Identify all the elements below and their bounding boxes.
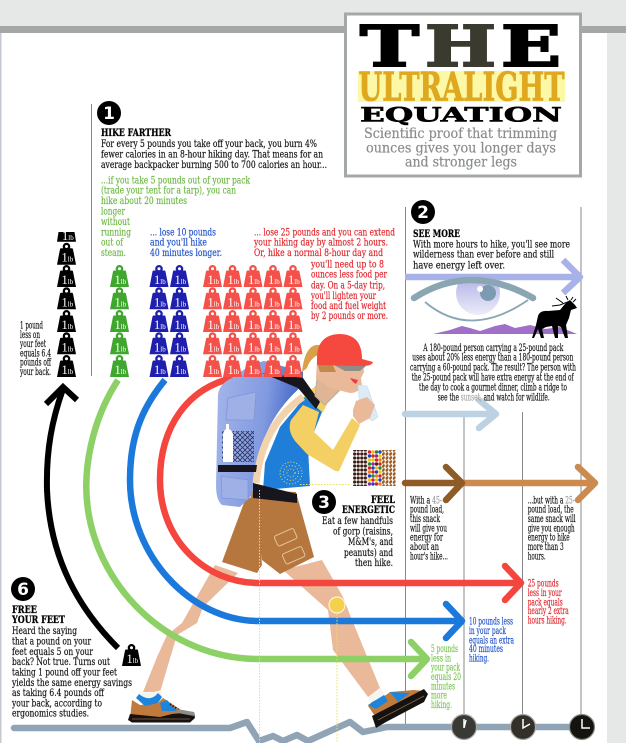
text: 5 pounds less: minutes [431,681,455,692]
frame sheath [256,397,303,483]
vest spiral [280,462,302,484]
weight: near foot [122,644,141,666]
blue text: 40 minutes longer. [150,248,222,259]
text: 25-pound load: same snack will [528,514,576,525]
text: 25-pound load: more than 3 [528,542,564,553]
heading: SEE MORE [413,229,460,240]
text: 5 pounds less: more [431,691,447,702]
intro text: With more hours to hike, you'll see more [413,239,570,250]
arm sleeve [290,405,360,471]
weights: red stack: 1lb [268,318,280,332]
subtitle [364,126,557,170]
badge 3: 3 [318,493,330,513]
weights: black stack: 1lb [62,340,74,354]
arrow: black arc up to weight stack [46,387,118,648]
text: 10 pounds less: hiking. [469,654,489,665]
caption: 1 pound less: less on [20,330,40,341]
shorts [222,490,314,574]
badge 6: 6 [17,580,29,600]
text: 5 pounds less: hiking. [431,700,452,711]
backpack [216,361,303,507]
body text: Eat a few handfuls [322,516,393,527]
weights: red stack: 1lb [208,363,220,377]
red text: by 2 pounds or more. [311,311,388,322]
text: 10 pounds less: 10 pounds less [469,616,513,627]
icon: purple mountains [433,324,577,334]
pack pockets [221,392,256,500]
weights: red stack: 1lb [248,363,260,377]
cap [317,334,373,366]
clock 2 [510,714,536,740]
red text: you'll need up to 8 [310,260,384,271]
green text: running [101,228,131,238]
weights: red stack: 1lb [208,295,220,309]
badge 1: 1 [103,104,115,124]
text: 45-pound load: this snack [410,514,441,525]
weights: blue stack: 1lb [154,318,166,332]
clock 3 [570,714,594,740]
text: 5 pounds less: less in [431,653,451,664]
weights: red stack: 1lb [248,295,260,309]
caption: 1 pound less: your back. [19,367,51,378]
green text: steam. [101,248,126,259]
text: 25-pound load: ...but with a 25- [528,495,575,506]
green text [101,176,251,259]
weights: green stack: 1lb [114,295,127,309]
weights: black stack: 1lb [62,251,74,265]
caption: 1 pound less: equals 6.4 [20,349,51,360]
text: 10 pounds less [469,616,514,665]
arrow: green arc [86,380,427,659]
text: 45-pound load [410,495,448,562]
red text: ... lose 25 pounds and you can extend [254,228,395,238]
title: THE: H [425,14,496,80]
panel: 3 feel energetic [312,490,395,569]
mesh pocket [222,431,254,462]
weights: black stack: 1lb [62,295,74,309]
weights: blue stack [150,265,189,377]
text: 45-pound load: hour's hike... [410,551,448,562]
arrow: brown short [405,467,462,500]
weights: blue stack: 1lb [154,273,166,287]
caption: 1 pound less: 1 pound [20,321,43,332]
title: THE: E [501,14,561,80]
arrow: light blue [405,400,496,428]
body text: peanuts) and [344,548,393,559]
caption: 1 pound less [19,321,52,378]
dotted guide lines [260,484,351,743]
body text: taking 1 pound off your feet [12,668,117,679]
weights: red stack: 1lb [268,295,280,309]
panel: 1 hike farther [97,101,395,322]
ground line [14,722,575,741]
text: 25-pound load: hours. [528,551,546,562]
weights: red stack: 1lb [288,340,300,354]
weights: green stack [110,265,129,377]
weights: black stack: 1lb [62,363,74,377]
red text: your hiking day by almost 2 hours. [253,238,388,249]
body text: then hike. [355,558,393,569]
body text: ergonomics studies. [12,709,89,720]
intro text: average backpacker burning 500 to 700 calories an hour... [101,160,327,171]
text: 25-pound load [528,495,576,562]
text: 45-pound load: will give you [410,523,447,534]
vest [263,397,322,490]
weights: black stack: 1lb [62,273,74,287]
weights: blue stack: 1lb [174,273,187,287]
weights: blue stack: 1lb [154,340,166,354]
red text: ounces less food per [311,270,387,281]
green text: ...if you take 5 pounds out of your pack [101,176,251,186]
weights: green stack: 1lb [114,340,127,354]
M&M's [368,450,382,486]
weights: red stack: 1lb [248,318,260,332]
water bottle [223,424,233,462]
panel: 6 free your feet [11,577,132,720]
text: 25-pound load: energy to hike [528,533,570,544]
text: 5 pounds less: your pack [430,663,461,674]
text: 25 pounds less [528,579,569,626]
red text [253,228,395,322]
weights: red stack: 1lb [228,273,240,287]
subtitle: ounces gives you longer days [366,140,556,156]
body text [410,343,576,404]
text: 25-pound load: pound load, the [528,505,574,516]
weights: blue stack: 1lb [174,295,187,309]
badge 2: 2 [417,203,429,223]
heading: FEEL [371,495,395,506]
text: 25-pound load: give you enough [528,523,575,534]
weights: red stack: 1lb [268,363,280,377]
intro text: fewer calories in an 8-hour hiking day. That means for an [101,150,323,160]
icon: eye [414,271,533,321]
clock 1 [452,714,476,740]
caption: 1 pound less: pounds off [20,357,52,368]
green text: hike about 20 minutes [101,196,187,207]
weights: red stack [203,265,302,377]
body text: your back, according to [11,699,102,710]
divider rules [92,104,581,727]
weights: red stack: 1lb [208,318,220,332]
red text: day. On a 5-day trip, [311,280,385,291]
icon: back boot [128,690,195,722]
weights: red stack: 1lb [268,273,280,287]
weights: black stack [57,229,76,377]
body text: that a pound on your [12,636,91,647]
straps [218,373,320,503]
icon: knee joint [329,597,345,613]
text: 10 pounds less: 40 minutes [469,644,503,655]
weights: green stack: 1lb [114,273,127,287]
icon: front boot [368,688,428,728]
red text: you'll lighten your [310,291,376,302]
body text: Heard the saying [12,626,77,637]
body text: see the sunset, and watch for wildlife. [438,393,550,404]
weights: red stack: 1lb [228,340,240,354]
green text: longer [101,207,125,218]
body text: yields the same energy savings [11,678,132,689]
yellow shirt body [302,380,333,420]
weights: red stack: 1lb [208,273,220,287]
weights: red stack: 1lb [288,295,300,309]
intro text [101,139,327,171]
subtitle: and stronger legs [405,154,517,170]
title: EQUATION: EQUATION [360,102,562,126]
glasses [332,364,366,371]
text: 10 pounds less: equals an extra [469,635,514,646]
arrow: blue head [446,604,462,638]
badge 2 [411,200,435,224]
intro text: For every 5 pounds you take off your back, you burn 4% [101,139,317,150]
arrow: red head [505,566,521,600]
heading: YOUR FEET [11,615,65,626]
weights: red stack: 1lb [288,318,300,332]
subtitle: Scientific proof that trimming [364,126,557,142]
icon: gorp [353,450,396,486]
caption: 1 pound less: your feet [19,339,46,350]
green text: out of [101,238,124,249]
weights: blue stack: 1lb [174,363,187,377]
green text: without [101,217,130,228]
weights: red stack: 1lb [248,340,260,354]
body text [11,626,132,720]
weights: blue stack: 1lb [174,340,187,354]
blue text: ... lose 10 pounds [150,228,216,238]
heading: HIKE FARTHER [101,128,172,139]
body text [322,516,393,569]
panel: clocks [452,714,594,740]
body text: M&M's, and [348,537,393,548]
hand [353,397,375,424]
arrow: red arc [160,376,520,583]
weights: red stack: 1lb [208,340,220,354]
text: 25 pounds less: 25 pounds [528,579,559,590]
lips [350,378,358,384]
weights: red stack: 1lb [228,363,240,377]
text: 45-pound load: energy for [410,533,443,544]
heading [11,605,65,626]
heading: ENERGETIC [342,505,395,516]
text: 45-pound load: about an [410,542,439,553]
icon: elk [532,296,577,338]
text: 25 pounds less: less in your [528,588,562,599]
weights: red stack: 1lb [228,295,240,309]
title: THE: T [360,14,419,80]
blue text: and you'll hike [150,238,207,249]
red text: food and fuel weight [311,301,386,312]
body text: back? Not true. Turns out [12,657,110,668]
weight: near foot: 1lb [126,652,139,666]
weights: red stack: 1lb [228,318,240,332]
weights: red stack: 1lb [268,340,280,354]
weights: red stack: 1lb [288,273,300,287]
weights: black stack: 1lb [62,229,74,243]
red text: Or, hike a normal 8-hour day and [254,248,383,259]
text: 5 pounds less [430,644,461,711]
text: 5 pounds less: 5 pounds [431,644,458,655]
weights: blue stack: 1lb [154,295,166,309]
text: 45-pound load: pound load, [410,505,444,516]
badge 6 [11,577,35,601]
weights: black stack: 1lb [62,318,74,332]
heading: FREE [12,605,37,616]
weights: blue stack: 1lb [154,363,166,377]
text: 45-pound load: With a 45- [410,495,442,506]
illustration: hiker legs [143,560,380,697]
weights: red stack: 1lb [248,273,260,287]
intro text: have energy left over. [413,260,505,271]
ponytail [302,345,320,372]
text: 10 pounds less: in your pack [469,626,507,637]
heading [342,495,395,516]
title: THE [360,14,561,80]
weights: green stack: 1lb [114,363,127,377]
body text: feet equals 5 on your [12,647,93,658]
text: 5 pounds less: equals 20 [431,672,461,683]
panel: 2 see more [410,200,576,404]
neck [315,378,342,405]
arrow: green head [411,642,427,676]
badge 1 [97,101,121,125]
body text: as taking 6.4 pounds off [12,688,105,699]
arrow: blue arc [130,380,462,621]
text: 25 pounds less: hours hiking. [528,615,567,626]
hair side [317,363,336,372]
intro text [413,239,570,271]
illustration: hiker [216,334,378,574]
arrow: orange long [464,467,595,500]
weights: green stack: 1lb [114,318,127,332]
text: 25 pounds less: nearly 2 extra [528,606,569,617]
weights: blue stack: 1lb [174,318,187,332]
text: 25 pounds less: pack equals [528,597,563,608]
head [316,360,364,393]
blue text [150,228,222,259]
green text: (trade your tent for a tarp), you can [101,186,236,197]
body text: of gorp (raisins, [333,527,393,538]
intro text: wilderness than ever before and still [413,250,554,261]
panel: title box [346,14,580,176]
weights: red stack: 1lb [288,363,300,377]
water bottle in hand [358,385,378,421]
arrow: see more [405,260,580,293]
